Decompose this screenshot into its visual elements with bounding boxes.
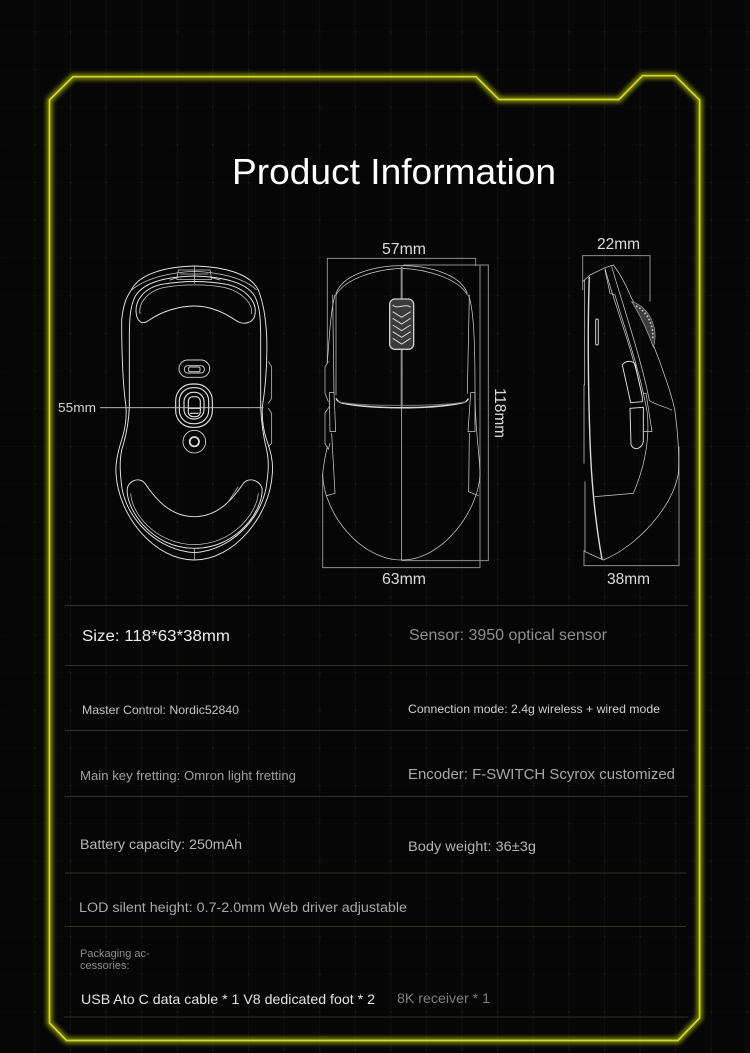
sensor (176, 384, 212, 427)
weight: Body weight: 36±3g (408, 839, 536, 854)
neon frame (50, 76, 700, 1040)
dimension boxes (323, 258, 488, 568)
body outline (583, 265, 679, 560)
main key: Main key fretting: Omron light fretting (80, 768, 296, 783)
spec table (64, 606, 688, 1017)
scroll wheel (632, 302, 655, 347)
dimension 22mm: 22mm (597, 236, 640, 253)
dimension 118mm: 118mm (491, 388, 508, 438)
encoder: Encoder: F-SWITCH Scyrox customized (408, 766, 675, 783)
dimension 63mm: 63mm (382, 571, 426, 588)
55mm dimension line (100, 406, 263, 409)
left side buttons (325, 362, 330, 449)
side buttons (622, 361, 643, 449)
sensor: Sensor: 3950 optical sensor (409, 627, 608, 644)
dome (336, 266, 467, 293)
size: Size: 118*63*38mm (82, 628, 230, 645)
receiver: 8K receiver * 1 (397, 990, 490, 1006)
LOD: LOD silent height: 0.7-2.0mm Web driver adjustable (79, 900, 407, 915)
dimension 57mm: 57mm (382, 241, 426, 258)
switch slot (179, 360, 210, 377)
centre line (399, 267, 405, 407)
master control: Master Control: Nordic52840 (82, 703, 239, 717)
slot (596, 319, 598, 345)
inner outline (120, 276, 268, 553)
battery: Battery capacity: 250mAh (80, 837, 242, 852)
right side buttons (268, 362, 272, 447)
dimension boxes (583, 256, 679, 566)
rear seam (193, 548, 195, 560)
top glide skate (136, 282, 255, 323)
mouse side view (583, 256, 679, 566)
button seam (336, 398, 468, 408)
grip edge (588, 277, 602, 559)
side strips (329, 393, 475, 432)
side strip (643, 393, 652, 432)
accessories: USB Ato C data cable * 1 V8 dedicated foot * 2 (81, 991, 375, 1007)
outer outline (116, 266, 273, 560)
packaging label: cessories: (80, 960, 130, 972)
bottom glide skate (127, 480, 262, 548)
packaging label: Packaging ac- (80, 948, 150, 960)
connection mode: Connection mode: 2.4g wireless + wired mode (408, 702, 660, 716)
body sides and rear (323, 295, 480, 560)
top shell curves (605, 267, 672, 410)
dimension 55mm: 55mm (58, 400, 96, 415)
top port (170, 266, 220, 283)
dimension 38mm: 38mm (607, 571, 650, 588)
scroll wheel (390, 299, 414, 349)
mouse bottom view (100, 266, 273, 560)
mouse top view (323, 258, 488, 568)
rear dial (183, 430, 206, 453)
title: Product Information (232, 151, 556, 192)
